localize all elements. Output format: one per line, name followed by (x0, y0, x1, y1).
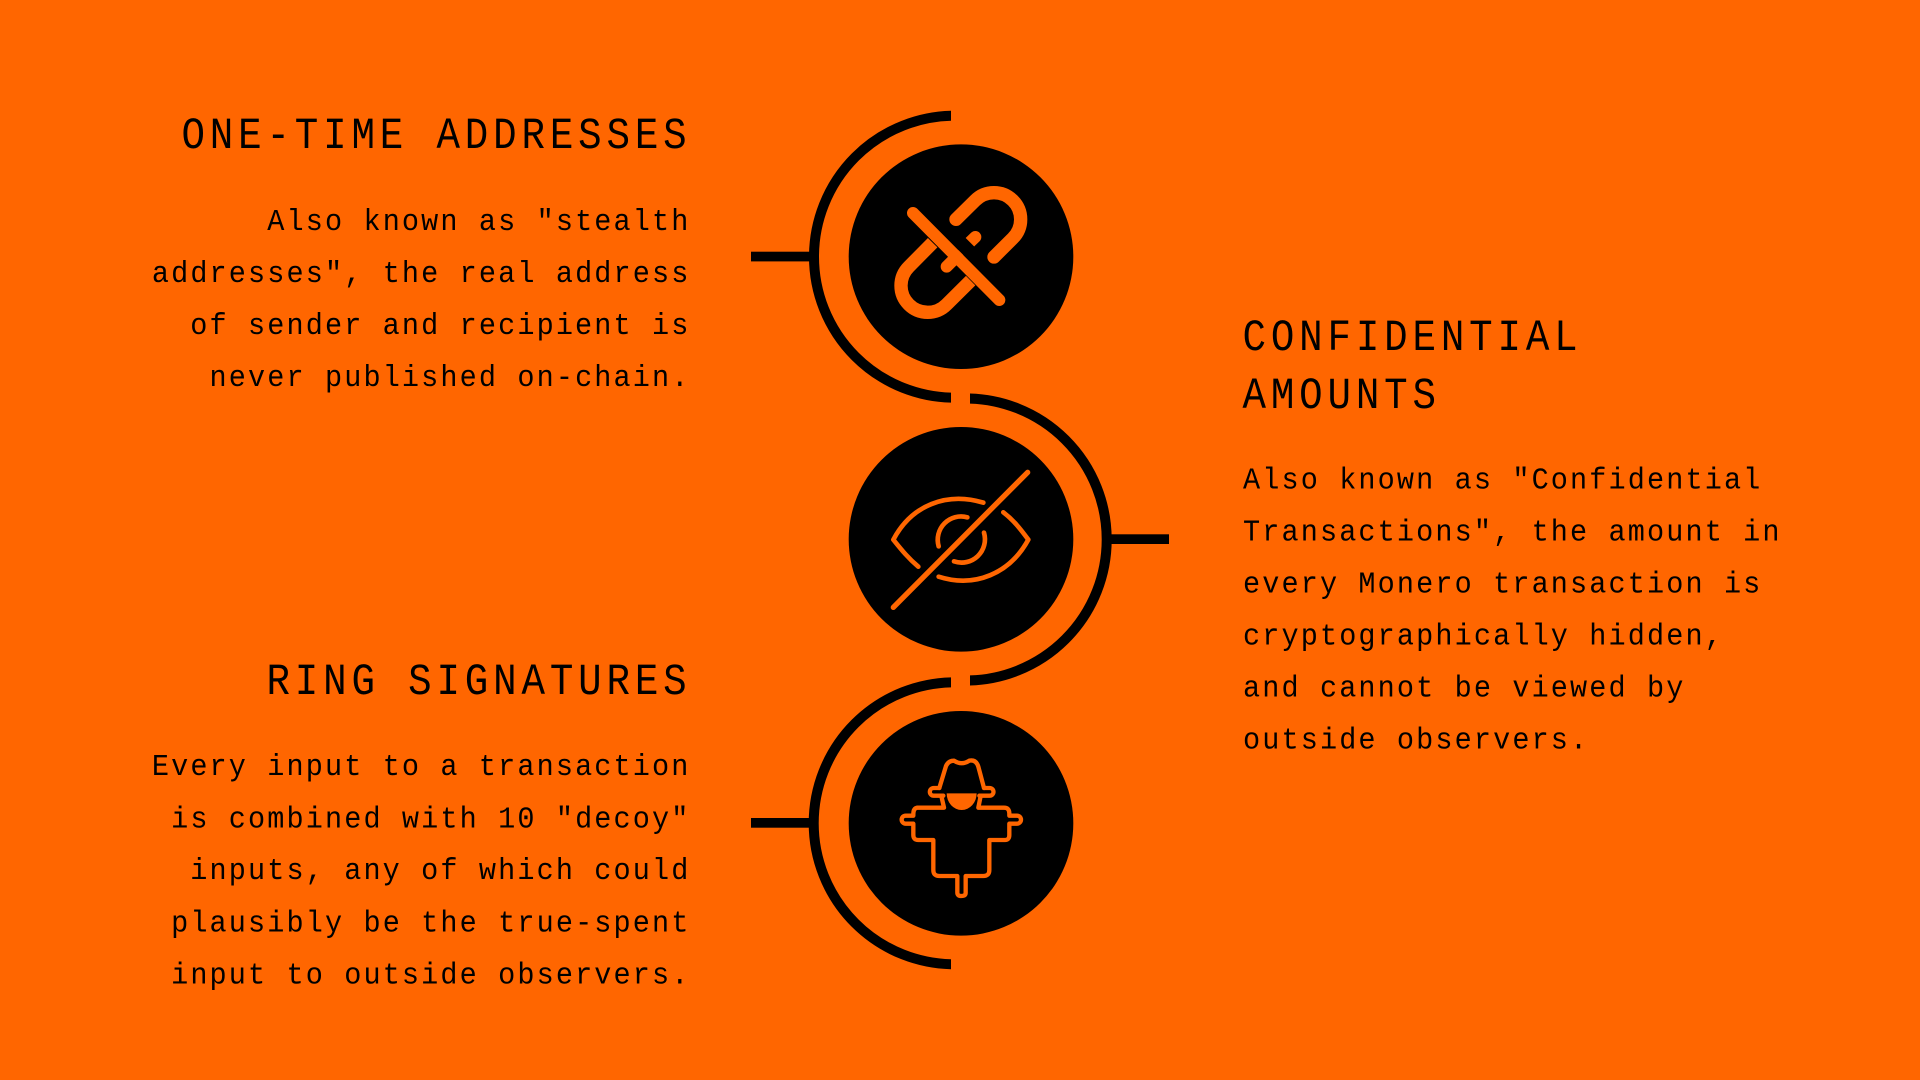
body: confidential amounts: outside observers. (1243, 722, 1589, 758)
heading: one-time addresses: ONE-TIME ADDRESSES (181, 111, 692, 162)
body: one-time addresses: of sender and recipient is (190, 308, 690, 343)
body: confidential amounts: Also known as "Confidential (1243, 462, 1762, 498)
body: ring signatures: is combined with 10 "decoy" (171, 802, 690, 837)
text block: ring signatures (152, 657, 692, 993)
body: one-time addresses (152, 204, 691, 395)
body: ring signatures: input to outside observers. (171, 957, 690, 993)
body: one-time addresses: Also known as "stealth (267, 204, 690, 239)
body: confidential amounts: cryptographically hidden, (1243, 618, 1724, 654)
body: confidential amounts (1243, 462, 1782, 758)
body: ring signatures: Every input to a transaction (152, 749, 690, 785)
heading: confidential amounts: CONFIDENTIAL (1242, 313, 1583, 364)
body: confidential amounts: every Monero transaction is (1243, 566, 1762, 602)
body: confidential amounts: and cannot be viewed by (1243, 670, 1685, 706)
body: ring signatures (152, 749, 691, 993)
body: one-time addresses: never published on-chain. (210, 360, 690, 395)
connector: arc and tick for ring signatures (751, 677, 951, 970)
heading: confidential amounts: AMOUNTS (1242, 371, 1441, 422)
icon: crossed-out eye in black circle (849, 427, 1073, 652)
body: ring signatures: inputs, any of which could (190, 853, 690, 889)
heading: ring signatures: RING SIGNATURES (266, 657, 692, 708)
text block: one-time addresses (152, 111, 692, 395)
body: one-time addresses: addresses", the real address (152, 256, 690, 291)
icon: scarecrow in black circle (849, 711, 1073, 936)
body: ring signatures: plausibly be the true-spent (171, 906, 690, 941)
body: confidential amounts: Transactions", the amount in (1243, 514, 1782, 550)
icon: broken link in black circle (849, 144, 1073, 369)
connector: arc and tick for confidential amounts (970, 394, 1169, 686)
connector: arc and tick for one-time addresses (751, 110, 951, 403)
heading: confidential amounts (1242, 313, 1583, 422)
text block: confidential amounts (1242, 313, 1782, 758)
